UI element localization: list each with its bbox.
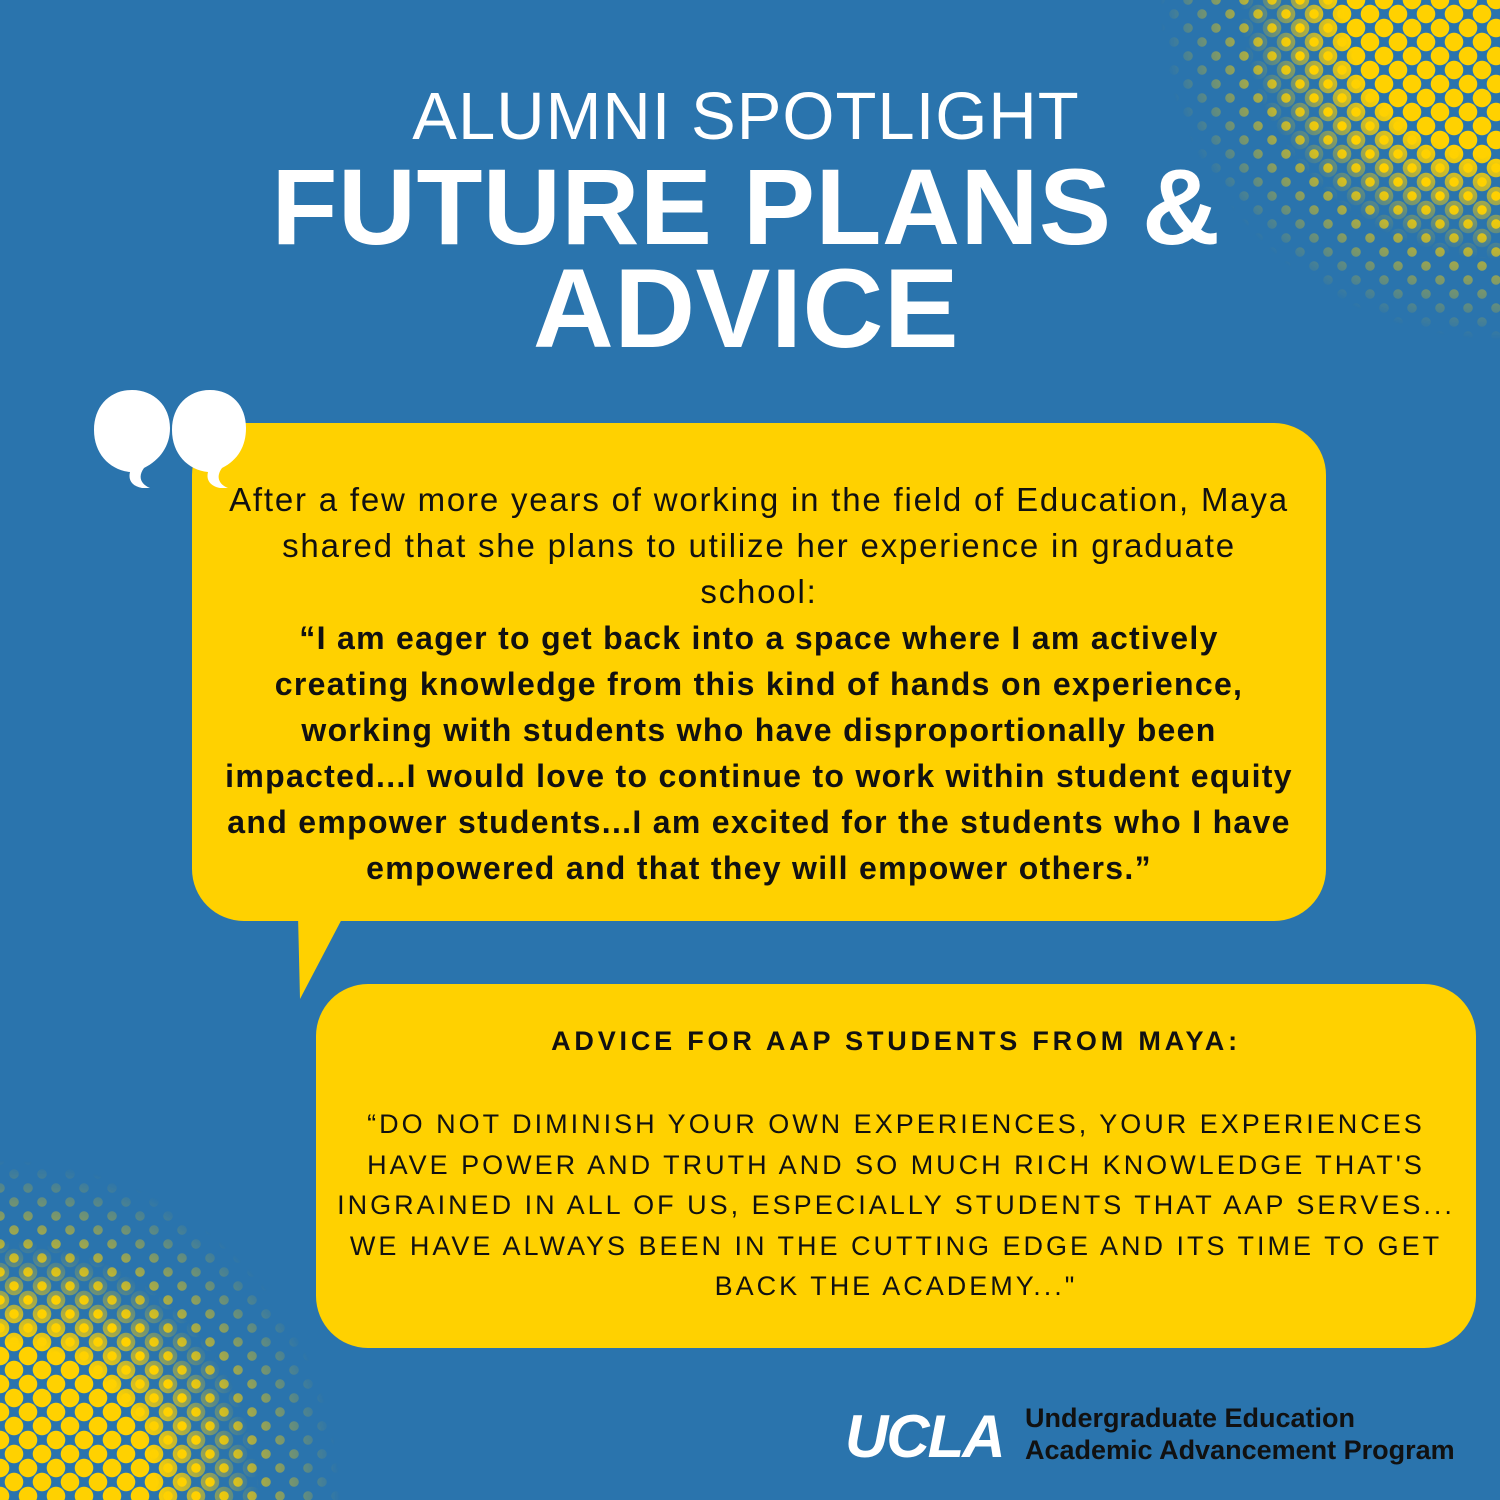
bubble 1 text: impacted...I would love to continue to work within student equity (225, 758, 1293, 794)
bubble 2 heading: ADVICE FOR AAP STUDENTS FROM MAYA: (551, 1026, 1241, 1056)
title: ADVICE (533, 246, 959, 371)
bubble 1 text: creating knowledge from this kind of hands on experience, (275, 666, 1243, 702)
bubble 2 quote: “DO NOT DIMINISH YOUR OWN EXPERIENCES, YOUR EXPERIENCES (367, 1109, 1425, 1139)
bubble 1 text: school: (700, 573, 818, 610)
bubble 2 quote: INGRAINED IN ALL OF US, ESPECIALLY STUDENTS THAT AAP SERVES... (337, 1190, 1455, 1220)
subtitle: ALUMNI SPOTLIGHT (412, 79, 1080, 154)
bubble 1 text (225, 481, 1293, 886)
bubble 2 quote: BACK THE ACADEMY..." (715, 1271, 1077, 1301)
title: FUTURE PLANS & (272, 146, 1220, 267)
bubble 1 text: empowered and that they will empower others.” (366, 850, 1152, 886)
speech bubble 2 (316, 984, 1476, 1348)
halftone bottom left (0, 1170, 334, 1500)
program name: Undergraduate Education (1025, 1403, 1355, 1433)
bubble 1 text: shared that she plans to utilize her experience in graduate (282, 527, 1236, 564)
bubble 2 quote (337, 1109, 1455, 1301)
program name (1025, 1403, 1455, 1465)
bubble 1 text: After a few more years of working in the field of Education, Maya (229, 481, 1289, 518)
bubble 2 quote: HAVE POWER AND TRUTH AND SO MUCH RICH KNOWLEDGE THAT'S (367, 1150, 1425, 1180)
program name: Academic Advancement Program (1025, 1435, 1455, 1465)
UCLA wordmark: UCLA (845, 1403, 1004, 1470)
bubble 1 text: “I am eager to get back into a space where I am actively (299, 620, 1219, 656)
bubble 2 quote: WE HAVE ALWAYS BEEN IN THE CUTTING EDGE AND ITS TIME TO GET (350, 1230, 1442, 1260)
speech bubble 1 (192, 423, 1326, 921)
quote mark icon (94, 390, 246, 488)
bubble 1 text: working with students who have disproportionally been (301, 712, 1217, 748)
halftone top right (1170, 0, 1500, 334)
bubble 1 text: and empower students...I am excited for the students who I have (227, 804, 1291, 840)
logo (845, 1403, 1455, 1470)
title (272, 146, 1220, 371)
